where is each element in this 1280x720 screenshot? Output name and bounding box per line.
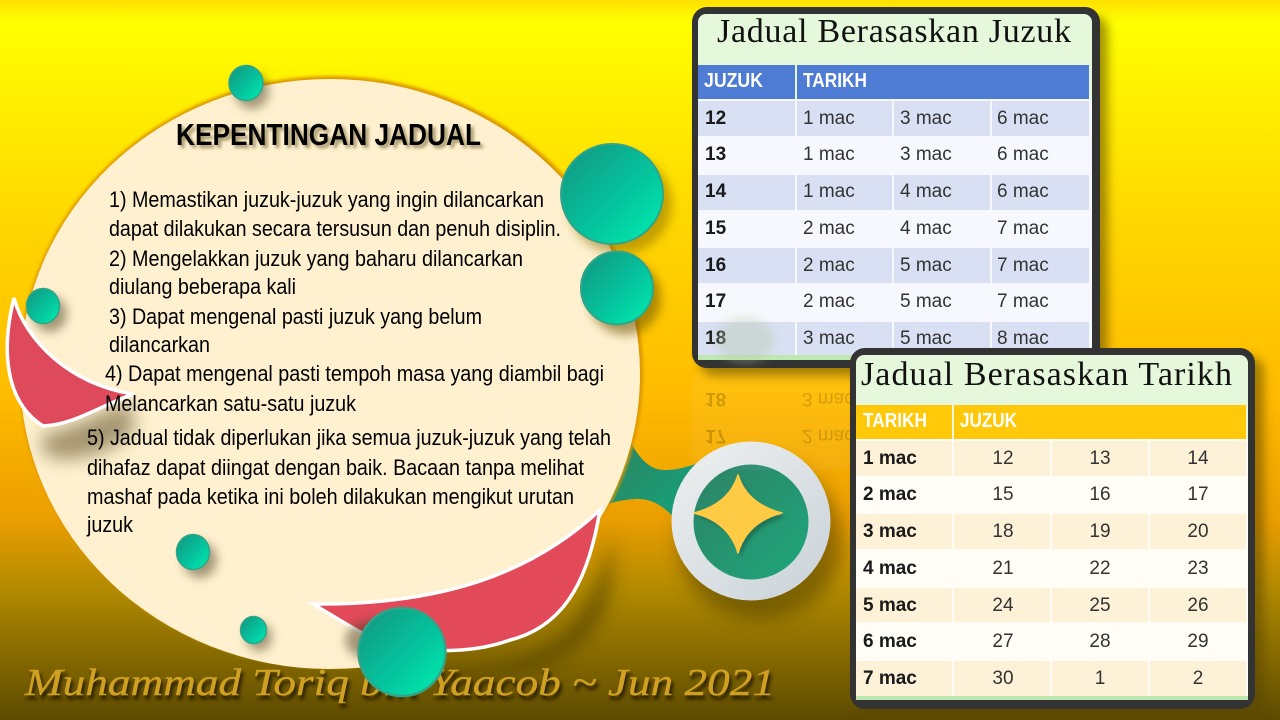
table rows: 2 mac bbox=[803, 255, 855, 276]
reflection of table: 3 mac bbox=[802, 388, 854, 409]
table rows: 6 mac bbox=[997, 144, 1049, 165]
table rows bbox=[856, 439, 1248, 700]
table rows: 30 bbox=[992, 668, 1014, 689]
table rows: 1 mac bbox=[803, 181, 855, 202]
connector to medallion bbox=[600, 438, 698, 525]
table rows: 15 bbox=[705, 218, 727, 239]
icon: star medallion bbox=[672, 442, 842, 620]
text block: list: 4) Dapat mengenal pasti tempoh masa yang diambil bagi bbox=[105, 361, 604, 386]
table rows: 3 mac bbox=[863, 521, 917, 542]
icon: left dot bbox=[26, 288, 67, 332]
table rows: 24 bbox=[992, 595, 1014, 616]
heading: KEPENTINGAN JADUAL bbox=[176, 117, 481, 152]
table rows: 22 bbox=[1089, 558, 1111, 579]
table rows: 14 bbox=[1187, 448, 1209, 469]
table rows: 16 bbox=[705, 255, 726, 276]
table rows: 3 mac bbox=[803, 328, 855, 349]
table rows: 5 mac bbox=[863, 595, 917, 616]
table header: JUZUK bbox=[960, 410, 1017, 432]
table rows: 18 bbox=[992, 521, 1014, 542]
table rows: 15 bbox=[992, 484, 1014, 505]
table rows: 12 bbox=[992, 448, 1014, 469]
table rows: 5 mac bbox=[900, 328, 952, 349]
table header: TARIKH bbox=[863, 410, 927, 432]
table rows: 1 bbox=[1095, 668, 1105, 689]
table rows: 2 mac bbox=[863, 484, 917, 505]
reflection of table: 17 bbox=[705, 425, 726, 446]
icon: bottom dot bbox=[345, 608, 446, 696]
table rows: 2 mac bbox=[803, 218, 855, 239]
table rows: 3 mac bbox=[900, 144, 952, 165]
text block: list: juzuk bbox=[86, 512, 134, 537]
table rows: 7 mac bbox=[863, 668, 917, 689]
table header: JUZUK bbox=[704, 70, 763, 92]
table rows: 5 mac bbox=[900, 255, 952, 276]
table rows: 13 bbox=[705, 144, 726, 165]
text block: list: 5) Jadual tidak diperlukan jika semua juzuk-juzuk yang telah bbox=[87, 425, 611, 450]
table rows: 17 bbox=[1187, 484, 1209, 505]
table rows: 3 mac bbox=[900, 108, 952, 129]
table rows: 4 mac bbox=[900, 181, 952, 202]
table rows: 6 mac bbox=[997, 181, 1049, 202]
table rows bbox=[698, 99, 1092, 360]
table rows: 19 bbox=[1089, 521, 1111, 542]
text block: list: dapat dilakukan secara tersusun dan penuh disiplin. bbox=[109, 216, 561, 241]
signature: Muhammad Toriq bin Yaacob ~ Jun 2021 bbox=[26, 666, 777, 708]
table rows: 14 bbox=[705, 181, 727, 202]
table rows: 2 bbox=[1193, 668, 1203, 689]
panel: juzuk table bbox=[692, 7, 1108, 376]
reflection of table bbox=[692, 370, 854, 470]
table rows: 4 mac bbox=[900, 218, 952, 239]
text block: list: dihafaz dapat diingat dengan baik. Bacaan tanpa melihat bbox=[87, 455, 585, 480]
reflection of table: 18 bbox=[705, 388, 726, 409]
icon: bottom red petal bbox=[313, 510, 600, 651]
panel: circle bbox=[19, 76, 643, 669]
table rows: 23 bbox=[1187, 558, 1209, 579]
text block: list: diulang beberapa kali bbox=[109, 274, 296, 299]
table rows: 6 mac bbox=[997, 108, 1049, 129]
table rows: 2 mac bbox=[803, 291, 855, 312]
icon: dot top bbox=[229, 66, 269, 109]
table rows: 6 mac bbox=[863, 631, 917, 652]
table rows: 1 mac bbox=[863, 448, 917, 469]
heading: KEPENTINGAN JADUAL bbox=[179, 120, 484, 155]
table header bbox=[698, 65, 1089, 99]
left petal shadow bbox=[40, 402, 135, 459]
signature: Muhammad Toriq bin Yaacob ~ Jun 2021 bbox=[24, 662, 775, 704]
table rows: 20 bbox=[1187, 521, 1209, 542]
panel: tarikh table bbox=[850, 348, 1264, 717]
table rows: 7 mac bbox=[997, 255, 1049, 276]
table rows: 21 bbox=[992, 558, 1014, 579]
text block: list: 2) Mengelakkan juzuk yang baharu dilancarkan bbox=[109, 246, 523, 271]
table rows: 8 mac bbox=[997, 328, 1049, 349]
table rows: 1 mac bbox=[803, 144, 855, 165]
decorative teal dots bbox=[26, 66, 672, 696]
table rows: 4 mac bbox=[863, 558, 917, 579]
reflection of table: 2 mac bbox=[802, 425, 854, 446]
table rows: 1 mac bbox=[803, 108, 855, 129]
bottom petal shadow bbox=[350, 530, 612, 678]
icon: medium dot bbox=[581, 252, 661, 335]
table rows: 16 bbox=[1089, 484, 1111, 505]
text block: list: Melancarkan satu-satu juzuk bbox=[105, 391, 357, 416]
text block: list: 3) Dapat mengenal pasti juzuk yang belum bbox=[109, 304, 482, 329]
text block: list: mashaf pada ketika ini boleh dilakukan mengikut urutan bbox=[87, 484, 574, 509]
table header: TARIKH bbox=[803, 70, 867, 92]
table rows: 26 bbox=[1187, 595, 1209, 616]
faint portrait bbox=[715, 318, 775, 362]
table rows: 7 mac bbox=[997, 218, 1049, 239]
table rows: 28 bbox=[1089, 631, 1111, 652]
table rows: 5 mac bbox=[900, 291, 952, 312]
text block: list: dilancarkan bbox=[109, 332, 210, 357]
table rows: 25 bbox=[1089, 595, 1111, 616]
table header bbox=[856, 405, 1246, 439]
table rows: 18 bbox=[705, 328, 726, 349]
icon: large dot bbox=[561, 144, 672, 254]
text block: list bbox=[86, 187, 611, 537]
table rows: 17 bbox=[705, 291, 726, 312]
table rows: 13 bbox=[1089, 448, 1111, 469]
table rows: 12 bbox=[705, 108, 726, 129]
icon: small dot bbox=[240, 616, 272, 651]
table rows: 27 bbox=[992, 631, 1014, 652]
text block: list: 1) Memastikan juzuk-juzuk yang ingin dilancarkan bbox=[109, 187, 544, 212]
table rows: 7 mac bbox=[997, 291, 1049, 312]
icon: left red petal bbox=[7, 298, 134, 426]
icon: lower dot bbox=[176, 534, 217, 578]
table rows: 29 bbox=[1187, 631, 1209, 652]
table title: Jadual Berasaskan Tarikh bbox=[861, 356, 1232, 393]
table title: Jadual Berasaskan Juzuk bbox=[717, 13, 1071, 50]
